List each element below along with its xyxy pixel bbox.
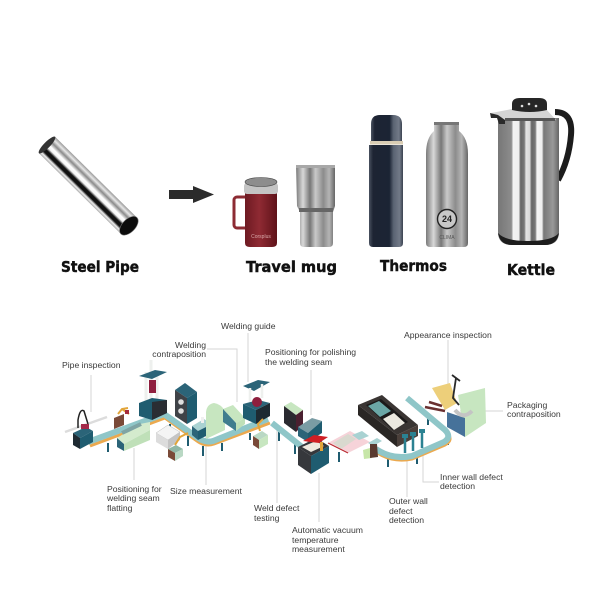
thermos [369,115,403,247]
label: Positioning for welding seam flatting: welding seam [106,493,160,503]
heading: Kettle: Kettle [507,261,555,279]
stainless bottle: 24 [442,214,452,224]
conveyor: second section [272,423,302,454]
steel tumbler [296,165,335,247]
steel pipe image [37,135,142,238]
station: pink table [328,431,370,462]
label: Pipe inspection: Pipe inspection [62,360,121,370]
station: grey bin [156,425,180,449]
travel mug: Corsplus [251,234,271,240]
label: Automatic vacuum temperature measurement: Automatic vacuum [292,525,363,535]
label: Positioning for welding seam flatting: flatting [107,503,133,513]
station: green cabinet [223,405,245,431]
stainless bottle [426,122,468,247]
travel mug [234,178,278,247]
station: wall defect detectors [402,429,425,453]
label: Welding contraposition: Welding [175,340,206,350]
station: welding press two [243,380,270,424]
station: size measurement [192,403,225,440]
label: Positioning for polishing the welding seam: the welding seam [265,357,332,367]
station: polishing machine [284,402,322,442]
label: Outer wall defect detection: Outer wall [389,496,428,506]
label: Positioning for polishing the welding seam: Positioning for polishing [265,347,356,357]
station: vacuum temperature box [298,435,329,474]
label: Inner wall defect detection: detection [440,481,475,491]
label: Packaging contraposition: contraposition [507,409,561,419]
heading: Travel mug: Travel mug [246,258,337,276]
label: Appearance inspection: Appearance inspection [404,330,492,340]
label: Weld defect testing: testing [254,513,280,523]
station: seam flatting machine [117,422,150,451]
conveyor: final curved section [376,398,450,467]
label: Inner wall defect detection: Inner wall defect [440,472,503,482]
station: robot arm centre [168,433,188,461]
leader lines [91,333,503,522]
stainless bottle: CLIMA [439,235,455,241]
station: welding press one [139,360,167,420]
station: robot arm right [253,419,268,449]
arrow [169,186,214,203]
label: Size measurement: Size measurement [170,486,243,496]
label: Outer wall defect detection: defect [389,506,413,516]
station: packaging [425,375,486,437]
label: Welding guide: Welding guide [221,321,276,331]
label: Welding contraposition: contraposition [152,349,206,359]
conveyor: first section [88,414,270,456]
label: Automatic vacuum temperature measurement: temperature [292,535,339,545]
station: pipe inspection [65,410,107,449]
label: Outer wall defect detection: detection [389,515,424,525]
label: Positioning for welding seam flatting: Positioning for [107,484,162,494]
label: Automatic vacuum temperature measurement: measurement [292,544,345,554]
station: robot arm left [114,408,129,429]
label: Weld defect testing: Weld defect [254,503,300,513]
kettle [490,98,571,245]
heading: Steel Pipe: Steel Pipe [61,258,139,276]
station: black inspection chamber [358,395,418,447]
station: measuring machine [175,383,197,424]
heading: Thermos: Thermos [380,257,447,275]
station: small green unit [363,438,382,459]
production line diagram [65,333,503,522]
label: Packaging contraposition: Packaging [507,400,547,410]
